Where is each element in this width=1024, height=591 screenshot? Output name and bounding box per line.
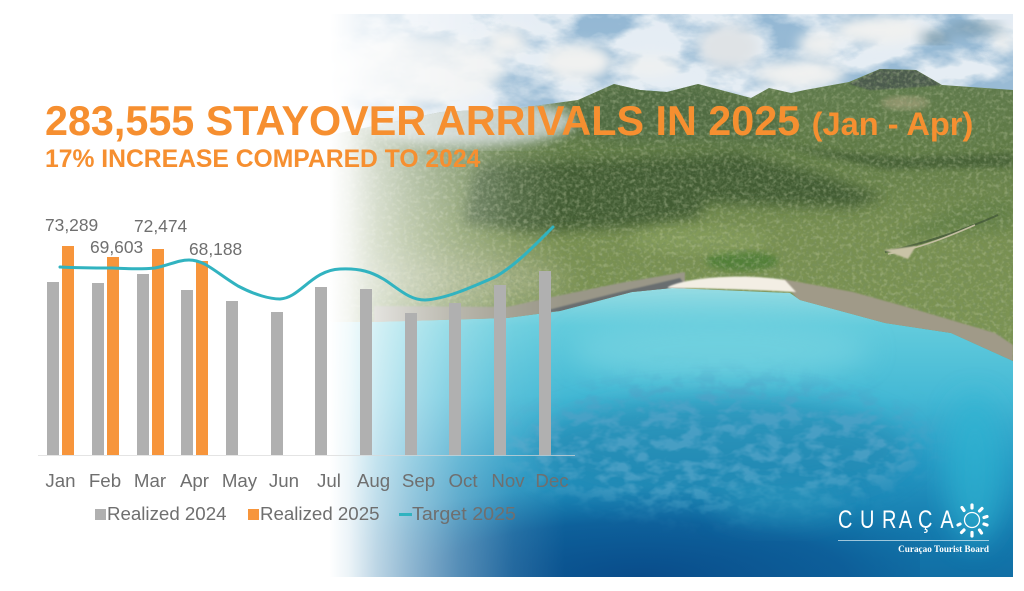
title: 283,555 STAYOVER ARRIVALS IN 2025 (Jan - Apr) <box>45 98 973 144</box>
month labels: Jun <box>269 470 299 491</box>
baseline <box>38 454 575 456</box>
month labels: Feb <box>89 470 121 491</box>
white fade over left of the photo <box>330 14 565 577</box>
bars: realized 2024 <box>47 271 551 455</box>
distant haze on the left ridge <box>365 98 575 146</box>
month labels: Dec <box>535 470 569 491</box>
green hills and mountains <box>330 60 1013 370</box>
legend <box>95 503 516 524</box>
rocky shoreline <box>374 272 685 326</box>
background aerial coastal photo <box>330 14 1013 577</box>
month labels: Jan <box>45 470 76 491</box>
icon: sun <box>958 505 987 536</box>
subtitle: 17% INCREASE COMPARED TO 2024 <box>45 146 481 173</box>
data labels: 72,474 <box>134 216 188 236</box>
month labels: May <box>222 470 258 491</box>
data labels: 69,603 <box>90 237 143 257</box>
logo: Curaçao Tourist Board: Curaçao Tourist Board <box>898 544 989 554</box>
month labels <box>45 470 569 491</box>
sea <box>330 285 1013 577</box>
data labels: 73,289 <box>45 215 98 235</box>
road <box>885 215 998 252</box>
month labels: Nov <box>491 470 525 491</box>
line: target 2025 <box>60 227 553 300</box>
bar chart: stayover arrivals by month <box>38 215 575 524</box>
legend: Target 2025 <box>412 503 516 524</box>
month labels: Sep <box>402 470 435 491</box>
bars: realized 2025 <box>62 246 208 455</box>
month labels: Apr <box>180 470 209 491</box>
month labels: Oct <box>448 470 478 491</box>
month labels: Aug <box>357 470 390 491</box>
month labels: Mar <box>134 470 166 491</box>
logo: Curaçao Tourist Board: CURAÇA <box>838 506 955 534</box>
data labels: 68,188 <box>189 239 242 259</box>
mountain slope shade and cloud shadows <box>368 69 1013 354</box>
beach <box>668 277 796 292</box>
month labels: Jul <box>317 470 341 491</box>
legend: Realized 2024 <box>107 503 226 524</box>
data labels <box>45 215 242 259</box>
logo: Curaçao Tourist Board <box>838 505 989 554</box>
legend: Realized 2025 <box>260 503 379 524</box>
